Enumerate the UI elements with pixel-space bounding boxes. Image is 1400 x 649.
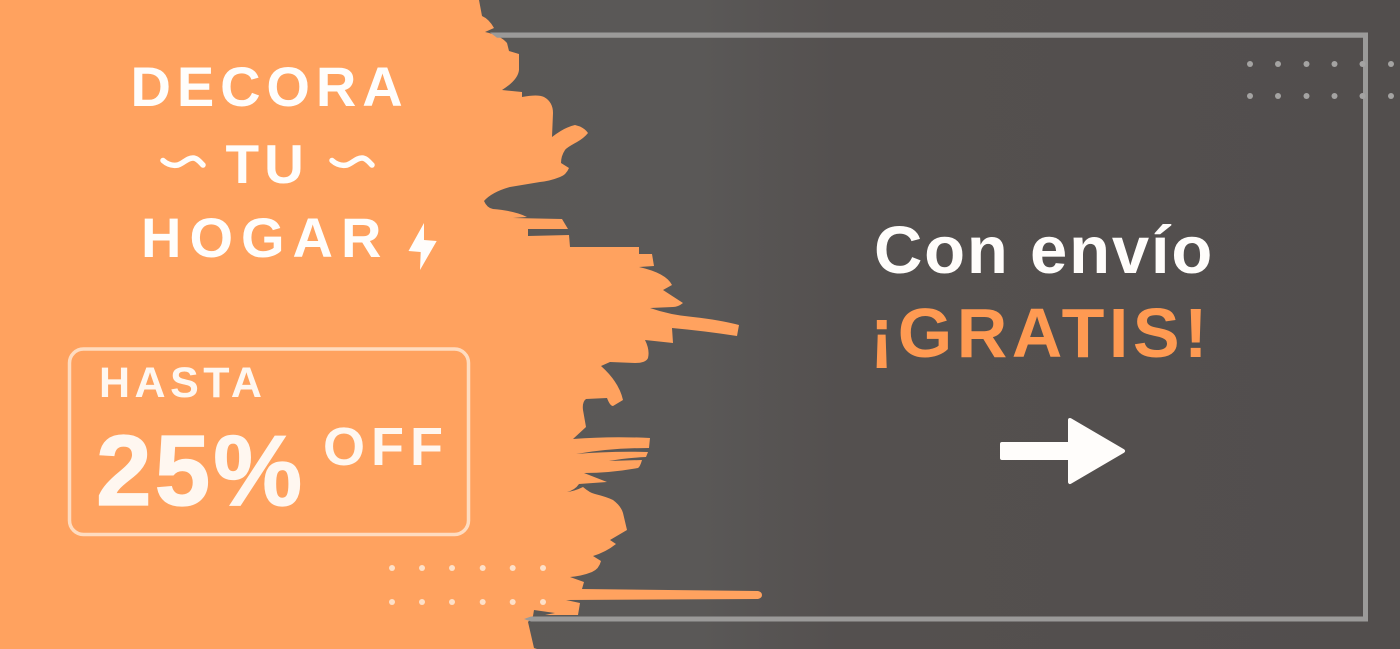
value: 25%: 25% [96,415,305,527]
discount box [70,349,468,534]
discount box outline [70,349,468,534]
text: ¡GRATIS!: ¡GRATIS! [870,294,1212,372]
heading line: TU: TU [226,133,309,195]
orange brush panel [0,0,762,649]
dot grid: top right [1247,61,1394,99]
text: Con envío: Con envío [874,213,1214,288]
heading line: DECORA: DECORA [130,55,409,118]
label: HASTA: HASTA [99,359,266,407]
frame outline [490,32,1368,622]
icon: lightning bolt [408,223,437,270]
heading: decora tu hogar [130,55,409,269]
icon: left wave [163,158,203,165]
icon: right wave [332,158,372,165]
dot grid: bottom left [389,565,546,605]
label: OFF: OFF [323,417,449,477]
heading line: HOGAR: HOGAR [141,206,389,269]
icon: right arrow [1002,420,1123,482]
